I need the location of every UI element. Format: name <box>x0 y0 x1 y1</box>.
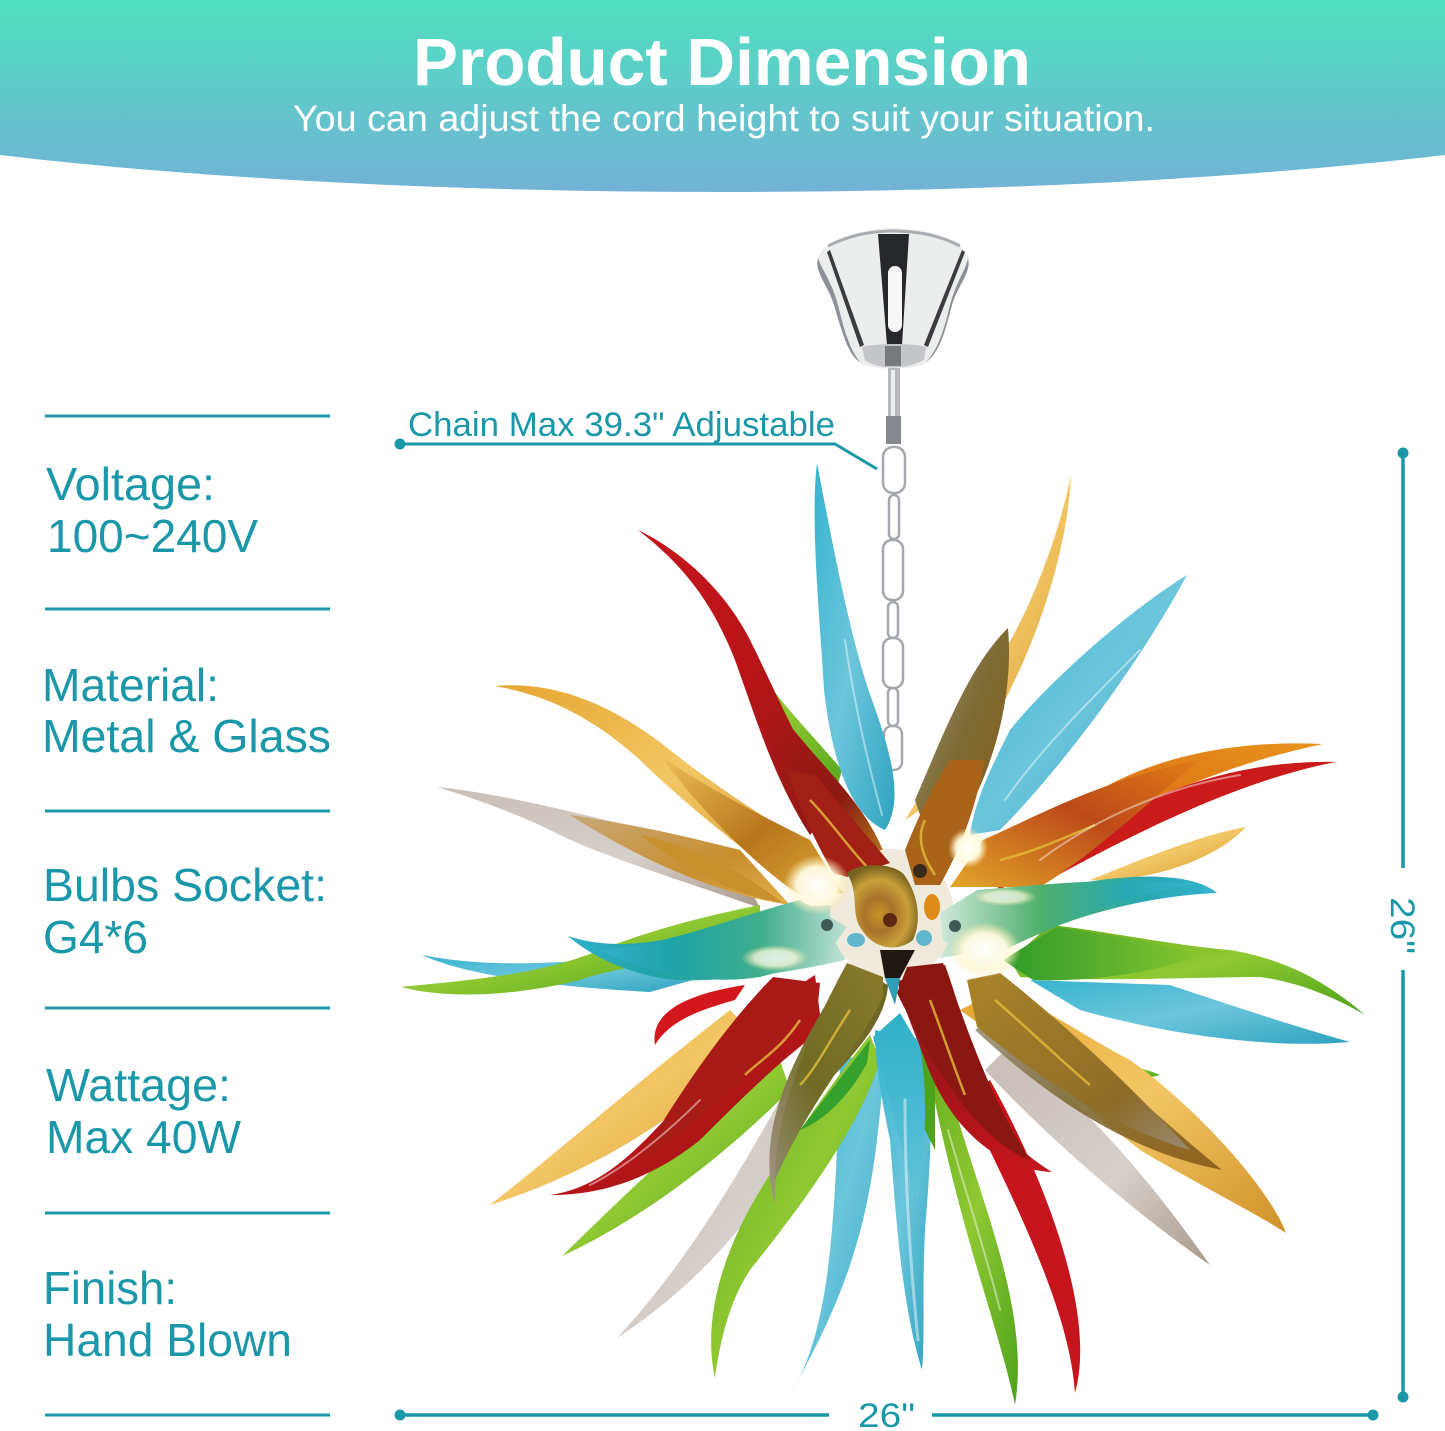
callout: chain length <box>394 406 877 469</box>
spec: material <box>42 659 331 762</box>
chain <box>883 368 905 770</box>
spec dividers <box>45 416 330 1415</box>
front glass petals <box>550 628 1217 1205</box>
spec: bulbs socket: G4*6 <box>43 911 148 963</box>
glowing hub core <box>741 828 1037 1005</box>
spec: bulbs socket: Bulbs Socket: <box>43 859 327 911</box>
spec: finish: Finish: <box>43 1262 177 1314</box>
dimension: height 26 inches: 26" <box>1383 897 1421 954</box>
ceiling canopy <box>817 228 969 369</box>
subtitle: You can adjust the cord height to suit your situation. <box>293 98 1155 139</box>
header banner <box>0 0 1445 192</box>
title: Product Dimension <box>413 25 1031 100</box>
spec: voltage: Voltage: <box>46 458 215 510</box>
petal highlights <box>590 640 1240 1340</box>
callout: chain length: Chain Max 39.3" Adjustable <box>408 406 835 444</box>
dimension: height 26 inches <box>1383 448 1421 1402</box>
spec: bulbs socket <box>43 859 327 963</box>
side glass petals <box>401 530 1365 1045</box>
glass bulbs around hub <box>600 755 1200 1200</box>
back glass petals <box>422 463 1350 1405</box>
spec: finish <box>43 1262 292 1366</box>
spec: voltage <box>46 458 258 562</box>
spec: wattage <box>46 1059 242 1163</box>
dimension: width 26 inches <box>394 1397 1378 1431</box>
spec: voltage: 100~240V <box>47 510 258 562</box>
spec: material: Material: <box>42 659 219 711</box>
spec: finish: Hand Blown <box>43 1314 292 1366</box>
spec: wattage: Max 40W <box>46 1111 242 1163</box>
specification list <box>42 416 331 1415</box>
spec: material: Metal & Glass <box>42 710 331 762</box>
chandelier <box>401 228 1365 1405</box>
spec: wattage: Wattage: <box>46 1059 231 1111</box>
